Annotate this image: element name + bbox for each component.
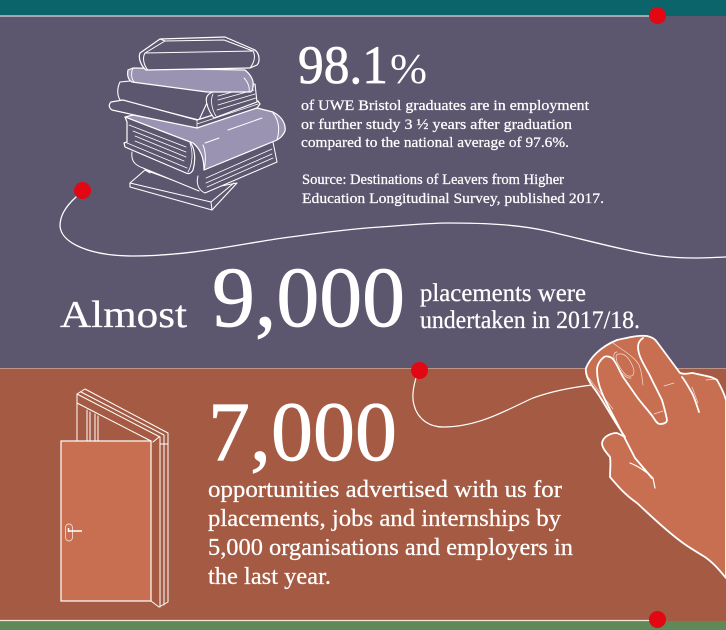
- icon: door: [61, 389, 168, 607]
- text: source: [302, 172, 604, 207]
- door frame: [77, 389, 168, 607]
- book: lower with pages: [132, 142, 277, 193]
- text: placements: placements were: [420, 280, 586, 307]
- text: placements: undertaken in 2017/18.: [420, 307, 640, 334]
- book: large lavender cover: [124, 108, 285, 174]
- text: graduates description: [301, 98, 590, 151]
- book: second lavender: [128, 68, 253, 92]
- band: teal top: [0, 0, 726, 16]
- text: opportunities: 5,000 organisations and employers in: [208, 535, 573, 561]
- cable: top curve: [60, 197, 726, 258]
- cable: mouse curve: [413, 378, 592, 427]
- fingers: [597, 338, 667, 478]
- text: source: Education Longitudinal Survey, published 2017.: [302, 191, 604, 207]
- text: placements: [420, 280, 640, 334]
- dot: bottom right: [649, 611, 666, 628]
- dot: mouse cable: [411, 362, 428, 379]
- text: source: Source: Destinations of Leavers from Higher: [302, 172, 564, 188]
- mouse details: [589, 343, 716, 414]
- door panel: [61, 441, 151, 601]
- stat: 98.1%: %: [390, 47, 427, 93]
- band: green bottom: [0, 621, 726, 630]
- panel: graduates and placements: [0, 16, 726, 368]
- text: graduates description: or further study 3 ½ years after graduation: [301, 117, 573, 133]
- dot: top right: [649, 7, 666, 24]
- book: bottom: [130, 170, 237, 210]
- text: opportunities: the last year.: [208, 564, 331, 590]
- text: opportunities: [208, 477, 573, 590]
- book: small pages block: [206, 84, 257, 118]
- panel: opportunities: [0, 368, 726, 621]
- icon: hand on mouse: [586, 336, 726, 578]
- text: opportunities: opportunities advertised with us for: [208, 477, 562, 503]
- stat: 9,000: 9,000: [212, 249, 405, 345]
- book: top: [139, 37, 259, 70]
- stat: 7,000: 7,000: [208, 385, 397, 479]
- text: graduates description: of UWE Bristol graduates are in employment: [301, 98, 590, 114]
- icon: stack of books: [109, 37, 285, 210]
- text: graduates description: compared to the national average of 97.6%.: [301, 135, 569, 151]
- stat: 98.1%: 98.1: [298, 35, 388, 95]
- door handle: [66, 524, 82, 541]
- book: third back and cover: [109, 80, 260, 129]
- text: almost: Almost: [60, 294, 187, 336]
- dot: books cable: [74, 182, 91, 199]
- hand shape: [586, 336, 726, 578]
- text: opportunities: placements, jobs and internships by: [208, 506, 561, 532]
